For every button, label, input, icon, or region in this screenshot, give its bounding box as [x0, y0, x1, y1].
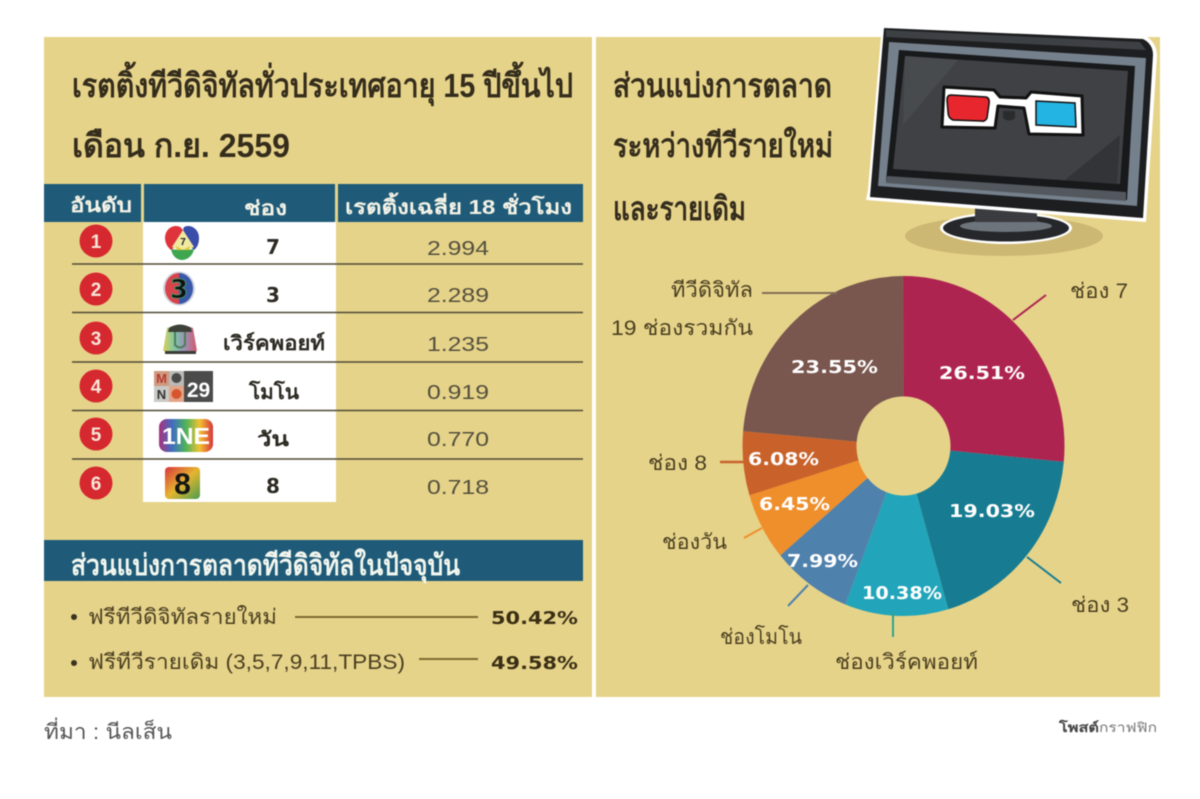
icon: MONO 29 logo: M: [156, 371, 167, 386]
title: market share between new and existing: ระหว่างทีวีรายใหม่: [613, 126, 833, 164]
donut chart: market share: [748, 336, 1035, 604]
table header row: [44, 184, 583, 222]
label: MONO: ช่องโมโน: [720, 625, 802, 649]
section heading bar: [44, 540, 583, 583]
title: digital TV ratings: [72, 61, 573, 164]
rating values: 0.718: [427, 477, 489, 499]
channel names: 7: [266, 235, 280, 259]
share row: existing free TV: ฟรีทีวีรายเดิม (3,5,7,9,11,TPBS): [88, 651, 405, 674]
slice percentages: 23.55%: [791, 357, 878, 378]
rating values: [427, 238, 489, 499]
title: market share between new and existing: [613, 67, 833, 227]
title: digital TV ratings: เรตติ้งทีวีดิจิทัลทั่วประเทศอายุ 15 ปีขึ้นไป: [72, 61, 573, 107]
label: digital TV 19 channels: [611, 279, 837, 340]
channel names: โมโน: [248, 380, 299, 404]
table header row: เรตติ้งเฉลี่ย 18 ชั่วโมง: [345, 192, 572, 219]
slice percentages: 19.03%: [949, 501, 1035, 522]
rating values: 2.289: [427, 285, 489, 307]
label: MONO: [720, 585, 808, 649]
row dividers: [72, 264, 583, 459]
rating values: 0.919: [427, 382, 489, 404]
rank badges: 3: [91, 329, 101, 350]
table header row: อันดับ: [70, 195, 132, 217]
rank badges: [80, 224, 112, 500]
credit: Post graphic: กราฟฟิก: [1099, 720, 1157, 735]
label: Workpoint: ช่องเวิร์คพอยท์: [835, 650, 978, 674]
title: digital TV ratings: เดือน ก.ย. 2559: [72, 127, 290, 164]
label: channel 7: ช่อง 7: [1070, 280, 1128, 303]
chart labels and leader lines: [611, 279, 1129, 674]
section heading bar: ส่วนแบ่งการตลาดทีวีดิจิทัลในปัจจุบัน: [71, 548, 460, 583]
slice percentages: 26.51%: [939, 363, 1025, 384]
rating values: 1.235: [427, 334, 489, 356]
rank badges: 6: [91, 474, 101, 495]
channel names: 3: [266, 283, 280, 307]
label: ONE: ช่องวัน: [662, 531, 727, 554]
slice percentages: 6.08%: [748, 449, 819, 470]
icon: channel 3 logo: [163, 272, 195, 306]
share row: existing free TV: 49.58%: [491, 653, 578, 674]
channel names: [223, 235, 325, 498]
rank badges: 2: [91, 280, 101, 301]
label: channel 3: [1027, 557, 1129, 617]
label: digital TV 19 channels: 19 ช่องรวมกัน: [611, 317, 753, 340]
ratings table: [44, 184, 583, 502]
icon: MONO 29 logo: N: [157, 387, 166, 402]
3D glasses: [942, 87, 1083, 135]
title: market share between new and existing: และรายเดิม: [613, 190, 746, 227]
donut slices: [800, 336, 1008, 556]
market share section: [44, 540, 583, 674]
icon: ONE logo: 1NE: [162, 423, 210, 449]
icon: MONO 29 logo: 29: [187, 379, 210, 402]
icon: MONO 29 logo: [154, 371, 213, 402]
label: channel 3: ช่อง 3: [1071, 594, 1129, 617]
slice percentages: 7.99%: [787, 551, 858, 572]
rank badges: 4: [91, 377, 102, 398]
rating values: 0.770: [427, 429, 489, 451]
label: ONE: [662, 528, 762, 554]
share row: existing free TV: [71, 651, 578, 674]
icon: channel 3 logo: 3: [170, 275, 188, 305]
slice percentages: [748, 357, 1035, 604]
label: channel 8: ช่อง 8: [648, 452, 707, 475]
slice percentages: 10.38%: [862, 583, 942, 604]
source note: ที่มา : นีลเส็น: [44, 717, 172, 744]
channel column background: [143, 222, 336, 502]
icon: channel 8 logo: [165, 467, 200, 501]
icon: Workpoint logo: [163, 324, 197, 354]
rank badges: 1: [91, 232, 102, 253]
share row: new digital TV: [71, 605, 578, 629]
share row: new digital TV: ฟรีทีวีดิจิทัลรายใหม่: [88, 605, 277, 629]
panel: right market share background: [596, 37, 1160, 697]
credit: Post graphic: [1058, 719, 1157, 735]
rating values: 2.994: [427, 238, 489, 260]
label: channel 8: [648, 452, 748, 475]
channel names: 8: [266, 474, 280, 498]
slice percentages: 6.45%: [759, 494, 830, 515]
title: market share between new and existing: ส่วนแบ่งการตลาด: [613, 67, 832, 104]
icon: TV with 3D glasses: [866, 24, 1157, 256]
label: digital TV 19 channels: ทีวีดิจิทัล: [671, 279, 753, 302]
icon: channel 7 logo: [165, 226, 199, 260]
rank badges: 5: [91, 425, 102, 446]
share row: new digital TV: 50.42%: [491, 608, 578, 629]
credit: Post graphic: โพสต์: [1058, 719, 1099, 735]
label: channel 7: [1013, 280, 1128, 320]
icon: channel 7 logo: 7: [180, 237, 186, 248]
table header row: ช่อง: [244, 198, 287, 220]
channel names: เวิร์คพอยท์: [223, 332, 325, 355]
panel: left ratings background: [44, 37, 592, 697]
icon: ONE logo: [159, 419, 213, 452]
channel names: วัน: [257, 429, 289, 451]
icon: channel 8 logo: 8: [174, 468, 191, 501]
